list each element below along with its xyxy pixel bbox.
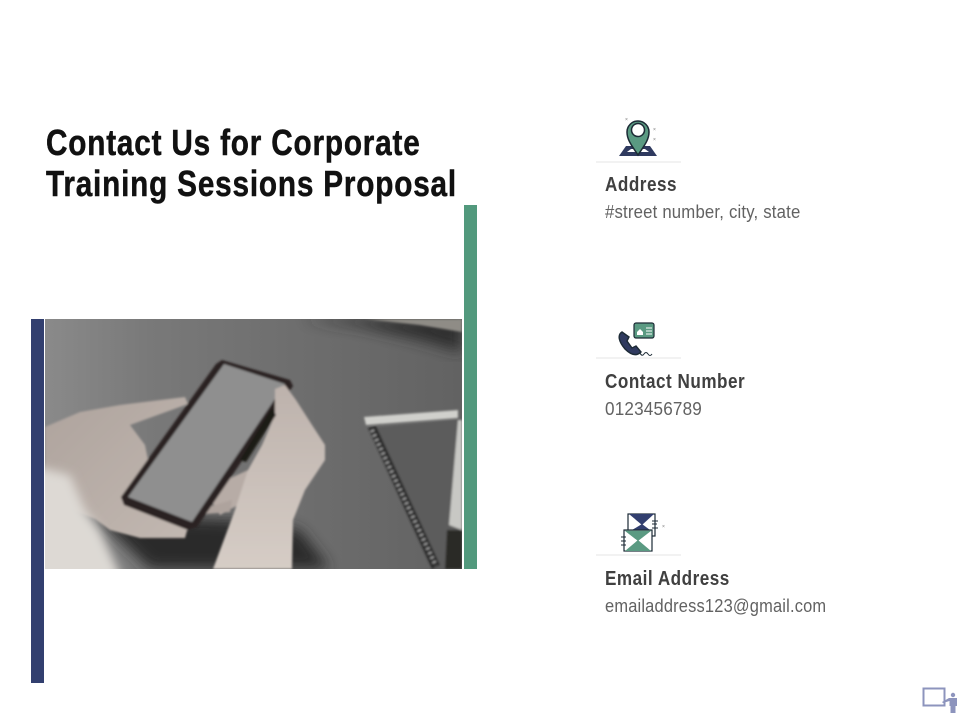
left hand xyxy=(45,397,190,538)
contact item: email xyxy=(596,513,826,616)
address text: #street number, city, state xyxy=(605,202,800,222)
icon: envelopes xyxy=(596,513,681,556)
icon: envelopes: × xyxy=(662,524,665,530)
title: Training Sessions Proposal xyxy=(46,163,457,204)
notebook xyxy=(370,420,458,569)
contact number heading: Contact Number xyxy=(605,371,745,393)
contact item: address xyxy=(596,117,800,222)
sleeve xyxy=(30,465,125,585)
icon: map pin: × xyxy=(653,127,656,133)
green accent bar xyxy=(464,205,477,569)
contact number text: 0123456789 xyxy=(605,399,702,419)
icon: map pin: × xyxy=(625,117,628,123)
photo: hands holding smartphone xyxy=(45,319,462,569)
phone xyxy=(121,360,293,530)
shadow under hands xyxy=(95,515,330,569)
address heading: Address xyxy=(605,174,677,196)
right hand xyxy=(213,385,325,569)
icon: map pin xyxy=(596,117,681,162)
email text: emailaddress123@gmail.com xyxy=(605,596,826,616)
icon: map pin: × xyxy=(653,137,656,143)
email heading: Email Address xyxy=(605,568,730,590)
title: Contact Us for Corporate xyxy=(46,122,421,163)
title xyxy=(46,122,457,204)
contact item: contact number xyxy=(596,322,745,419)
navy accent bar xyxy=(31,319,44,683)
icon: phone and id card xyxy=(596,322,681,358)
icon: presenter at board xyxy=(922,688,957,713)
